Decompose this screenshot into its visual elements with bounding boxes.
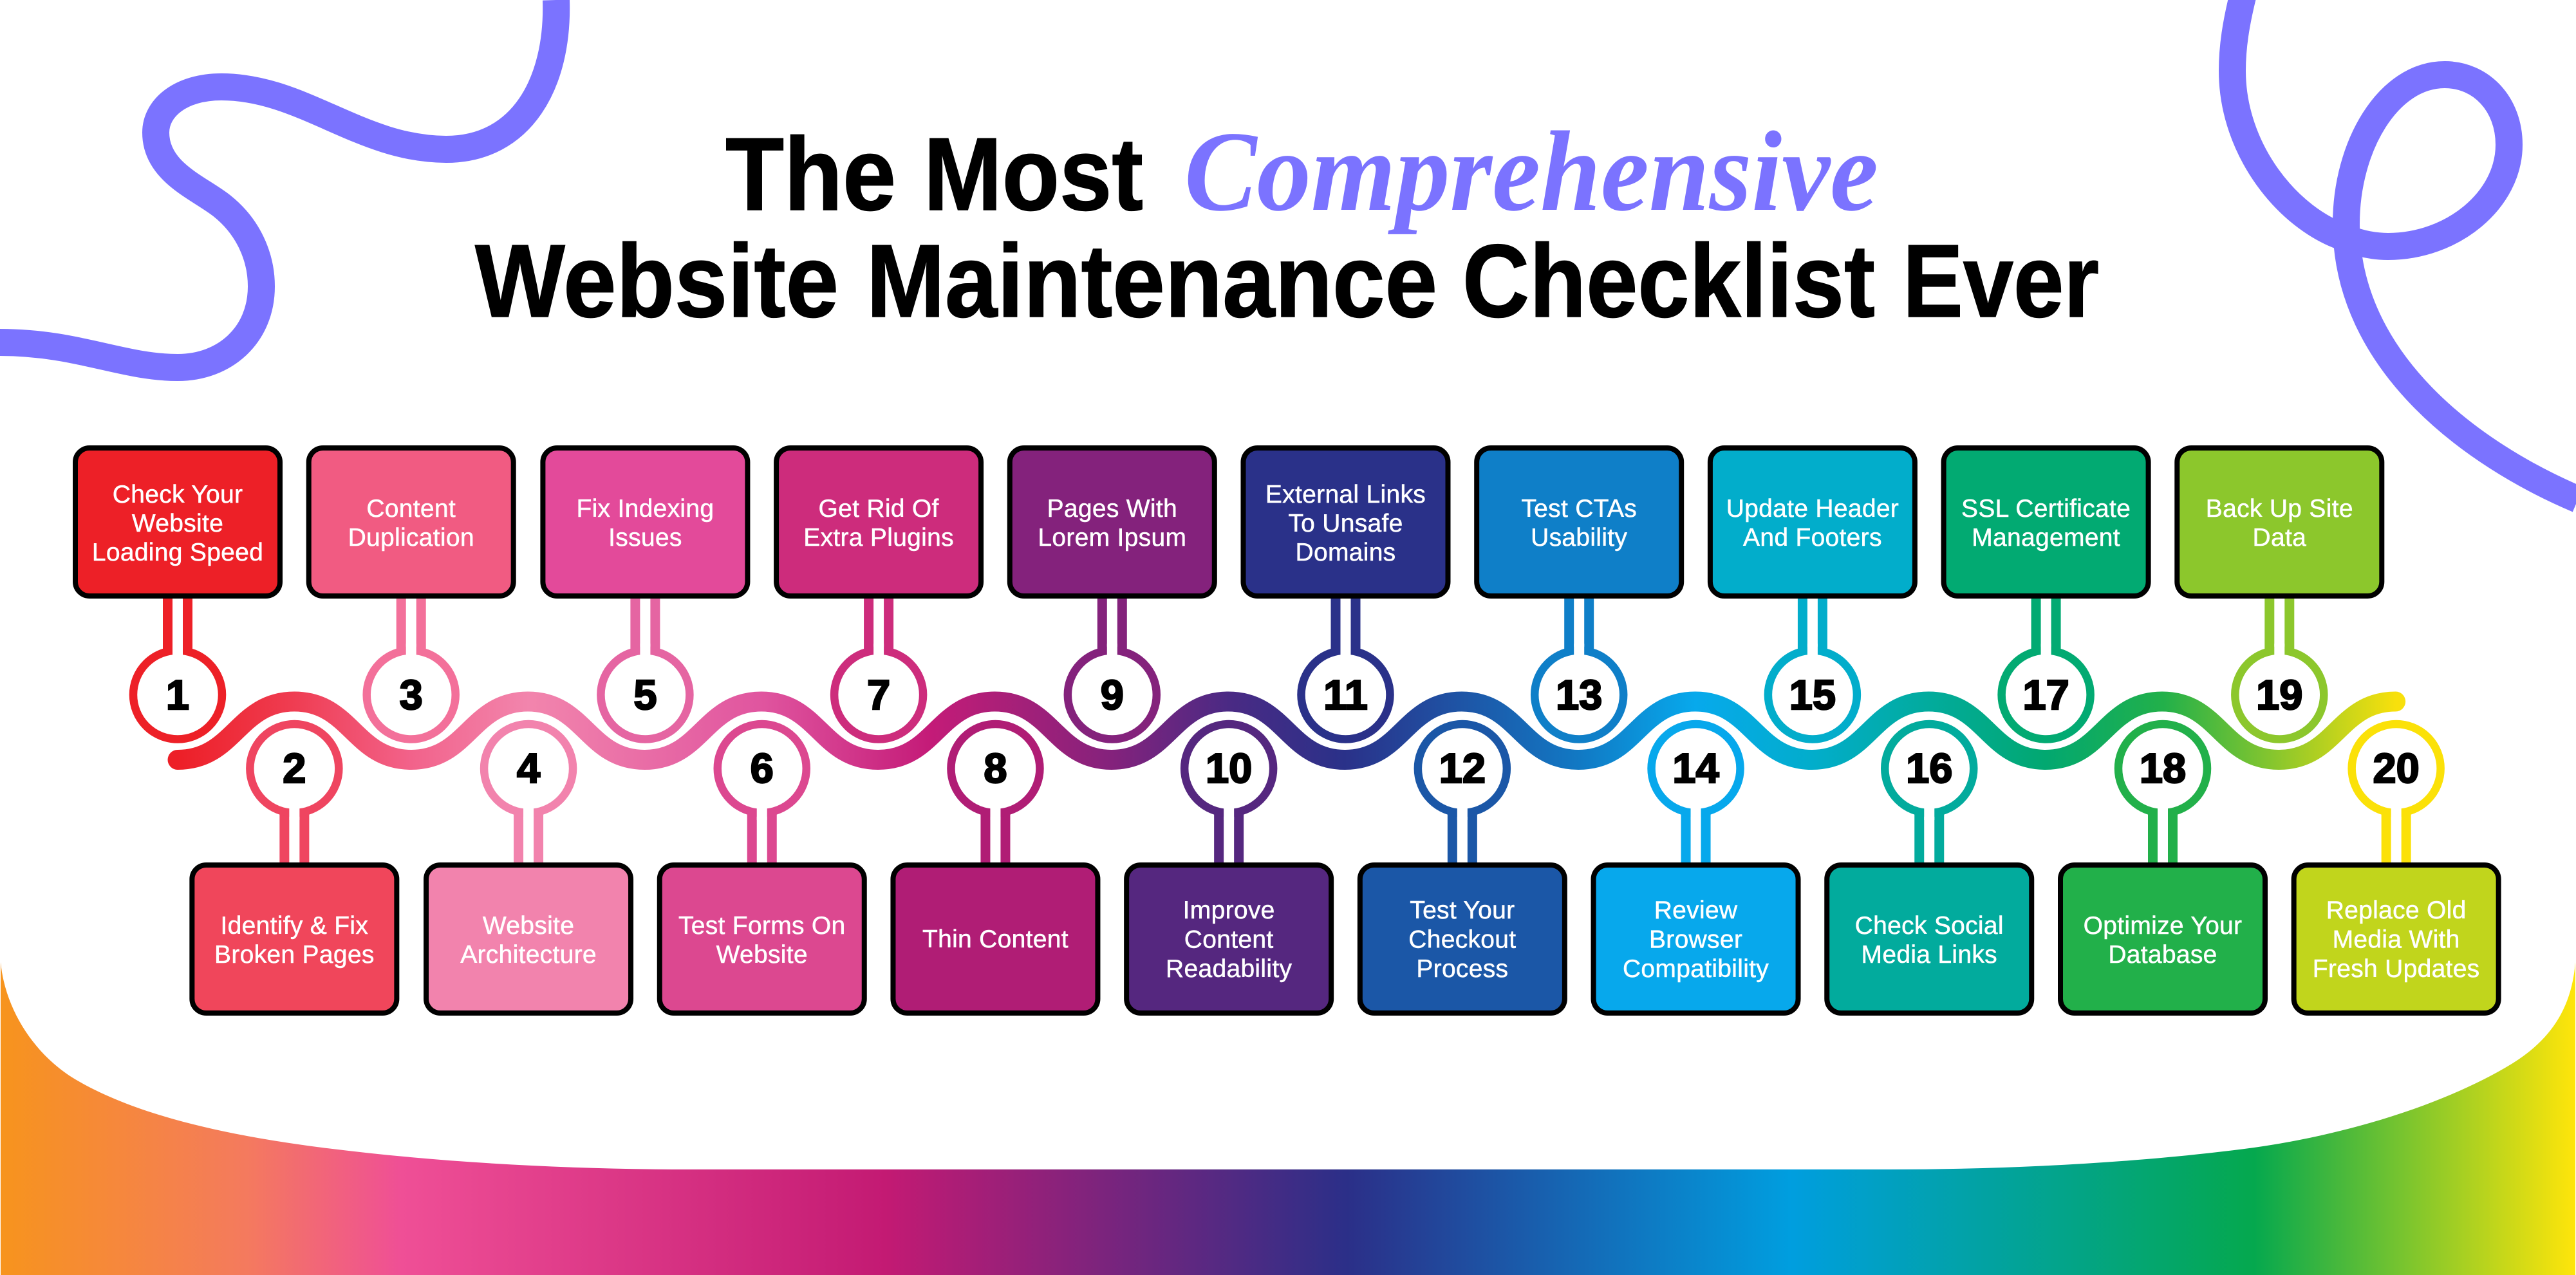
step 20: 20 bbox=[2373, 745, 2420, 792]
step 10: Content bbox=[1184, 926, 1274, 954]
step 17: 17 bbox=[2022, 671, 2069, 718]
step 8: Thin Content bbox=[922, 926, 1069, 953]
step 3: 3 bbox=[400, 671, 423, 718]
step 12 bbox=[1360, 724, 1565, 1013]
step 2: 2 bbox=[283, 745, 306, 792]
step 14: Browser bbox=[1649, 926, 1742, 954]
step 19: Back Up Site bbox=[2206, 495, 2353, 523]
step 11: Domains bbox=[1295, 539, 1395, 566]
step 14: Compatibility bbox=[1623, 955, 1769, 983]
step 15: And Footers bbox=[1743, 524, 1882, 552]
wavy timeline path bbox=[178, 702, 2396, 759]
step 16: 16 bbox=[1906, 745, 1952, 792]
title: Ever bbox=[1903, 223, 2099, 339]
step 13: 13 bbox=[1556, 671, 1602, 718]
step 5: Fix Indexing bbox=[576, 495, 714, 523]
step 1: Loading Speed bbox=[92, 539, 263, 566]
step 18 bbox=[2060, 724, 2265, 1013]
step 4: Website bbox=[483, 912, 574, 940]
step 11: To Unsafe bbox=[1288, 510, 1403, 537]
step 6: Test Forms On bbox=[678, 912, 846, 940]
step 2: Identify & Fix bbox=[221, 912, 368, 940]
step 11: 11 bbox=[1323, 671, 1368, 718]
step 14 bbox=[1594, 724, 1798, 1013]
step 12: 12 bbox=[1439, 745, 1486, 792]
step 10: Improve bbox=[1183, 897, 1275, 924]
step 13: Test CTAs bbox=[1521, 495, 1637, 523]
rainbow gradient footer bbox=[1, 962, 2575, 1275]
step 7: Extra Plugins bbox=[803, 524, 954, 552]
step 20: Replace Old bbox=[2326, 897, 2467, 924]
step 19 bbox=[2177, 448, 2382, 739]
title: Most bbox=[924, 116, 1143, 232]
decorative squiggle: top right bbox=[2232, 0, 2576, 499]
step 5: Issues bbox=[608, 524, 682, 552]
step 2 bbox=[192, 724, 397, 1013]
step 15: Update Header bbox=[1726, 495, 1899, 523]
step 4: 4 bbox=[517, 745, 540, 792]
step 1: Check Your bbox=[113, 481, 243, 508]
step 9: Lorem Ipsum bbox=[1038, 524, 1186, 552]
step 1: 1 bbox=[166, 671, 189, 718]
step 9: Pages With bbox=[1047, 495, 1177, 523]
step 13: Usability bbox=[1531, 524, 1627, 552]
step 16: Media Links bbox=[1862, 941, 1997, 969]
step 3: Content bbox=[366, 495, 456, 523]
step 11: External Links bbox=[1265, 481, 1426, 508]
step 18: Optimize Your bbox=[2084, 912, 2242, 940]
decorative squiggle: top left bbox=[0, 0, 556, 368]
step 12: Checkout bbox=[1408, 926, 1516, 954]
step 13 bbox=[1477, 448, 1681, 739]
step 18: 18 bbox=[2140, 745, 2186, 792]
title: Maintenance bbox=[866, 223, 1437, 339]
step 1: Website bbox=[132, 510, 223, 537]
step 16: Check Social bbox=[1855, 912, 2004, 940]
step 10: Readability bbox=[1166, 955, 1292, 983]
step 14: 14 bbox=[1672, 745, 1719, 792]
step 18: Database bbox=[2108, 941, 2217, 969]
step 15 bbox=[1710, 448, 1915, 739]
step 7: Get Rid Of bbox=[818, 495, 939, 523]
step 19: Data bbox=[2253, 524, 2306, 552]
step 3 bbox=[309, 448, 514, 739]
step 8: 8 bbox=[984, 745, 1007, 792]
step 14: Review bbox=[1654, 897, 1738, 924]
step 6 bbox=[660, 724, 864, 1013]
step 16 bbox=[1827, 724, 2031, 1013]
step 6: 6 bbox=[751, 745, 774, 792]
step 7 bbox=[776, 448, 981, 739]
step 4 bbox=[426, 724, 631, 1013]
step 12: Test Your bbox=[1410, 897, 1515, 924]
step 12: Process bbox=[1416, 955, 1508, 983]
step 17: SSL Certificate bbox=[1961, 495, 2131, 523]
step 15: 15 bbox=[1789, 671, 1836, 718]
step 10 bbox=[1126, 724, 1331, 1013]
step 1 bbox=[75, 448, 280, 739]
step 2: Broken Pages bbox=[214, 941, 375, 969]
step 20: Fresh Updates bbox=[2313, 955, 2479, 983]
step 6: Website bbox=[716, 941, 808, 969]
step 4: Architecture bbox=[460, 941, 597, 969]
step 19: 19 bbox=[2256, 671, 2302, 718]
step 17 bbox=[1944, 448, 2149, 739]
step 17: Management bbox=[1972, 524, 2120, 552]
step 9: 9 bbox=[1101, 671, 1124, 718]
step 8 bbox=[893, 724, 1097, 1013]
step 5: 5 bbox=[633, 671, 657, 718]
title: Website bbox=[475, 223, 839, 339]
title: Comprehensive bbox=[1184, 107, 1878, 235]
step 5 bbox=[543, 448, 747, 739]
step 20 bbox=[2294, 724, 2499, 1013]
title: Checklist bbox=[1462, 223, 1875, 339]
step 20: Media With bbox=[2333, 926, 2460, 954]
step 7: 7 bbox=[867, 671, 890, 718]
step 3: Duplication bbox=[348, 524, 474, 552]
step 9 bbox=[1010, 448, 1215, 739]
step 10: 10 bbox=[1206, 745, 1252, 792]
step 11 bbox=[1244, 448, 1448, 739]
title bbox=[475, 107, 2099, 339]
title: The bbox=[725, 116, 896, 232]
